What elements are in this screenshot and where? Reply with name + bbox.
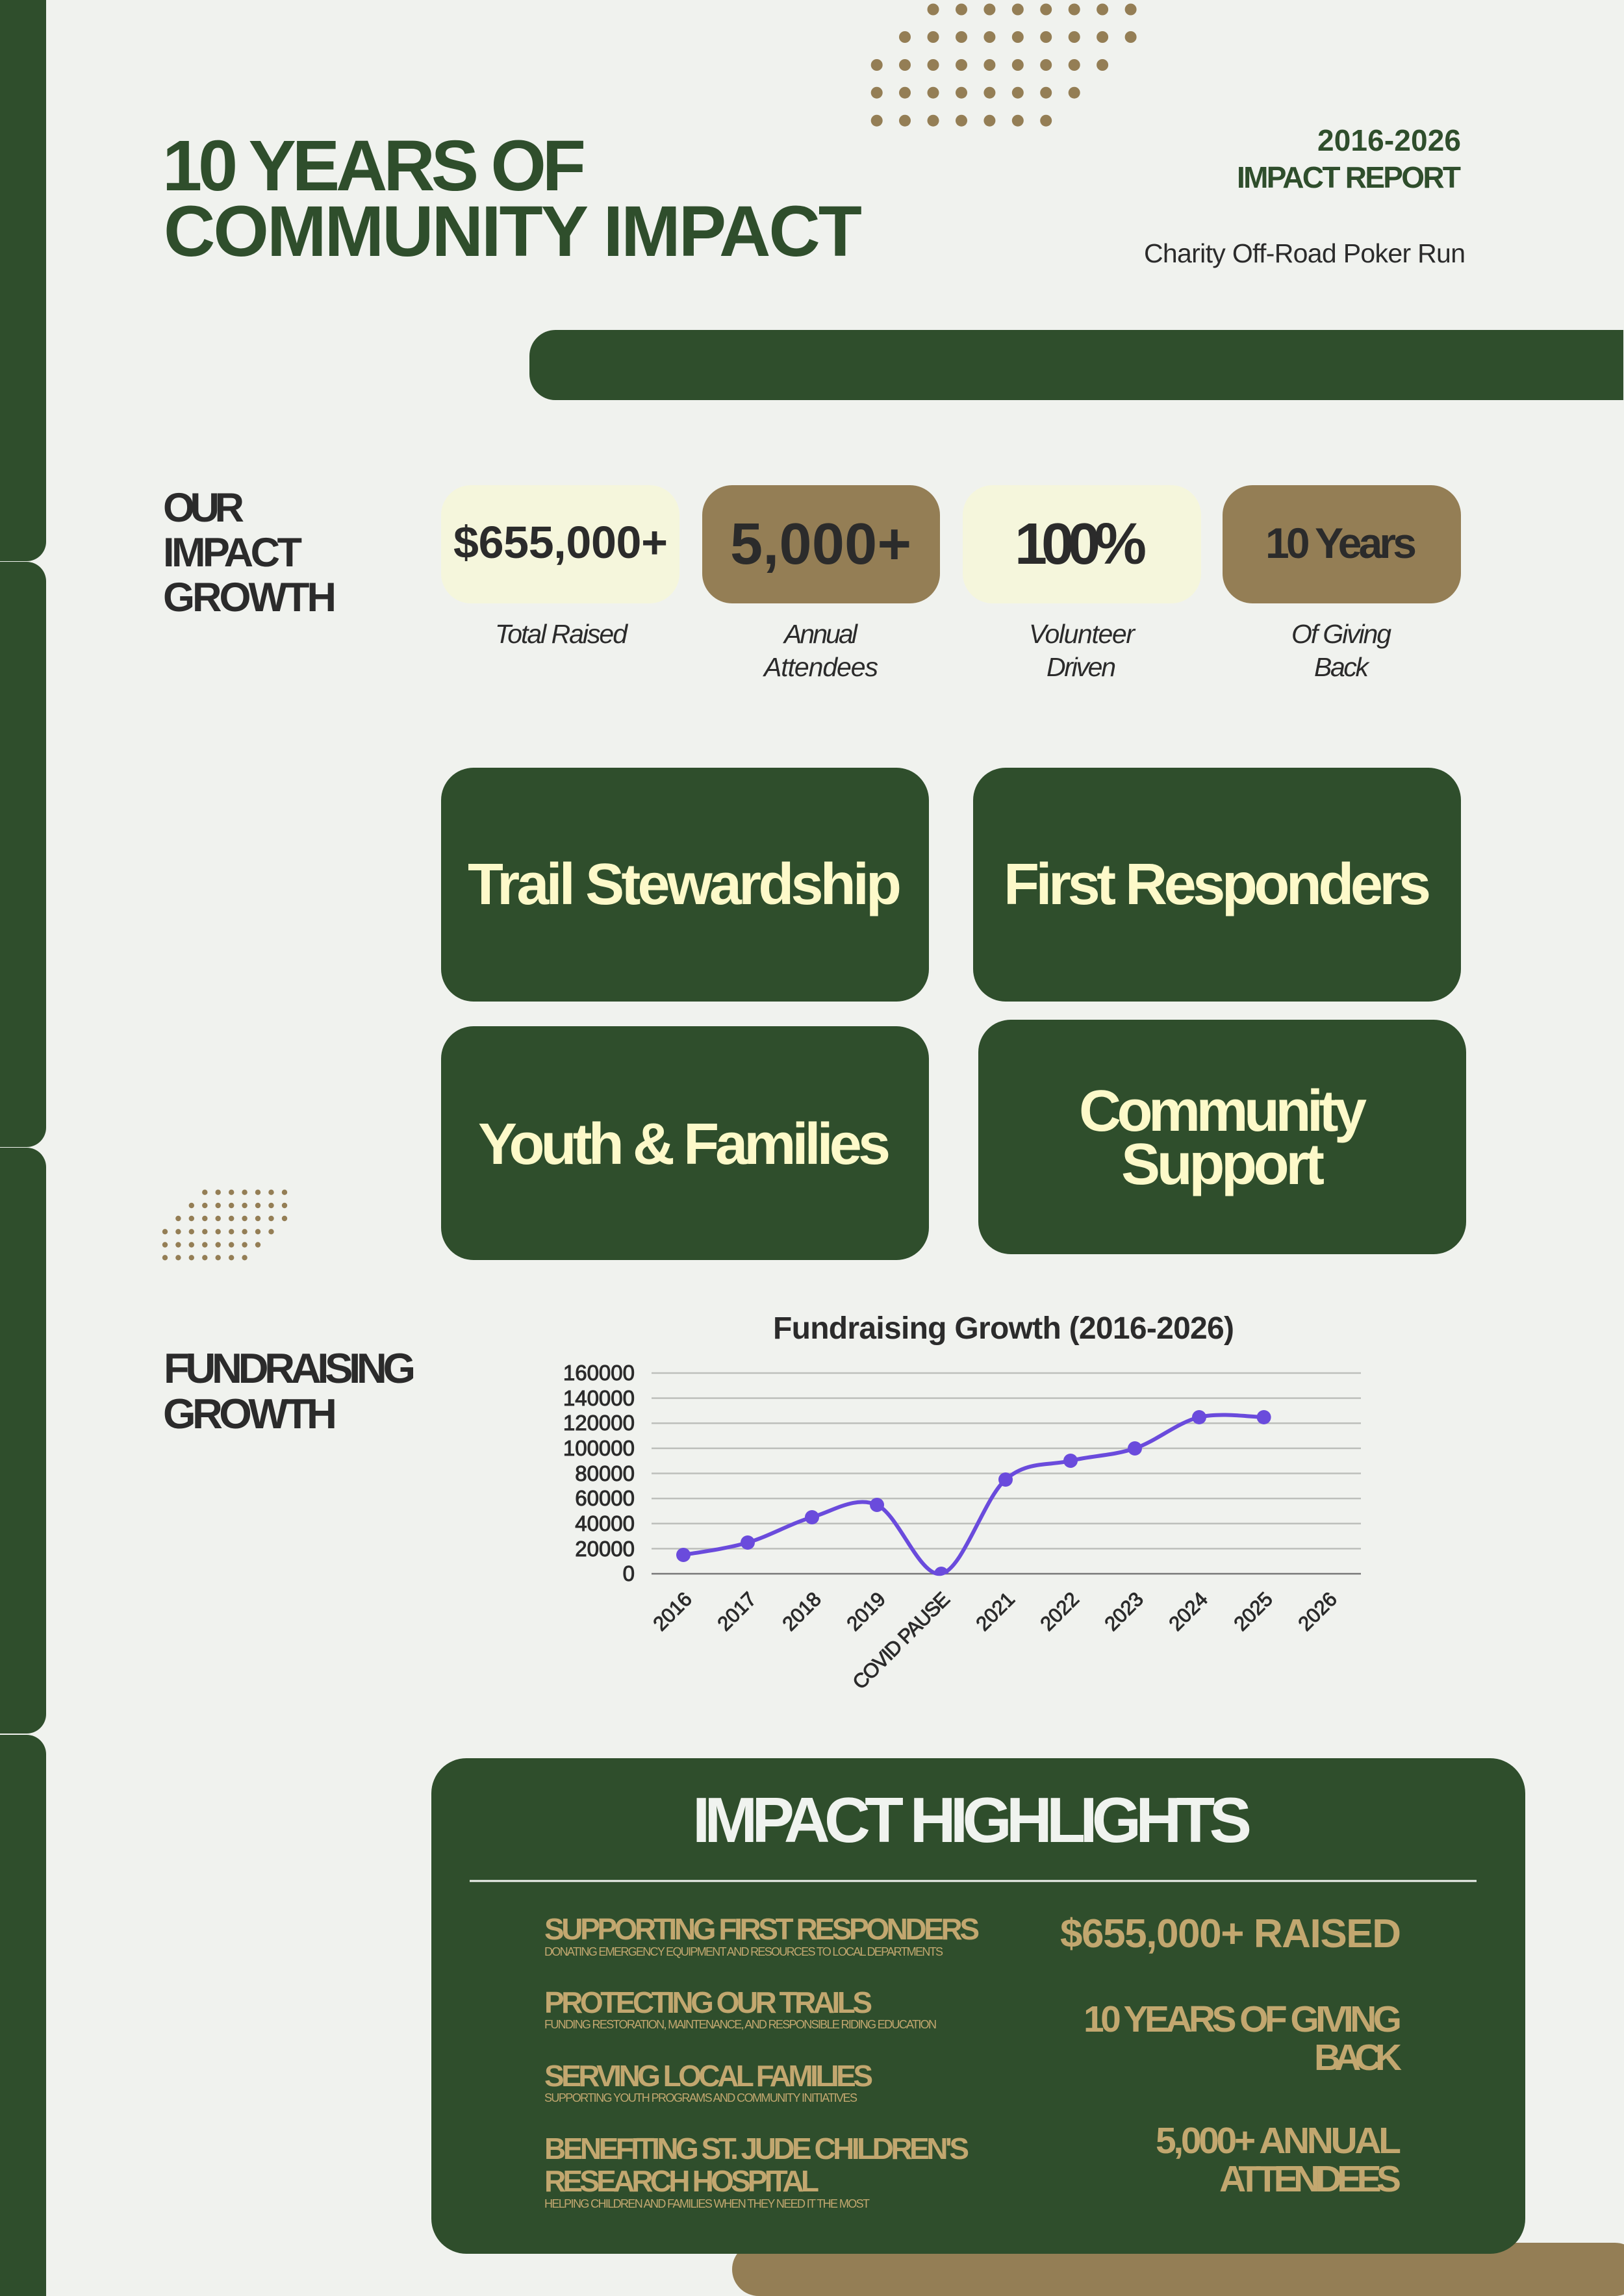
highlight: first responders: SUPPORTING FIRST RESPONDERS <box>544 1912 980 1946</box>
highlight: trails: FUNDING RESTORATION, MAINTENANCE, AND RESPONSIBLE RIDING EDUCATION <box>544 2018 937 2031</box>
gridlines <box>652 1373 1361 1574</box>
highlight: local families: SUPPORTING YOUTH PROGRAMS AND COMMUNITY INITIATIVES <box>544 2091 857 2104</box>
x axis labels <box>648 1587 1341 1694</box>
stat: of giving back: Back <box>1314 652 1371 682</box>
title: 10 YEARS OF <box>162 126 586 206</box>
x axis labels: 2019 <box>842 1587 890 1635</box>
data line <box>683 1415 1264 1574</box>
x axis labels: 2026 <box>1293 1587 1341 1635</box>
highlight: first responders: DONATING EMERGENCY EQUIPMENT AND RESOURCES TO LOCAL DEPARTMENTS <box>544 1945 943 1958</box>
highlight: trails: PROTECTING OUR TRAILS <box>544 1986 872 2019</box>
stat: of giving back: 10 Years <box>1265 519 1417 567</box>
x axis labels: COVID PAUSE <box>848 1587 954 1694</box>
stat: of giving back: Of Giving <box>1291 619 1391 649</box>
green header bar <box>529 330 1623 400</box>
highlight: trails <box>544 1986 937 2031</box>
stat: volunteer driven: 100% <box>1015 512 1147 577</box>
right stat: annual attendees <box>1156 2120 1401 2200</box>
report period heading <box>1237 123 1461 194</box>
card: community support: Community <box>1079 1079 1367 1144</box>
x axis labels: 2021 <box>971 1587 1019 1635</box>
highlight: st jude: HELPING CHILDREN AND FAMILIES WHEN THEY NEED IT THE MOST <box>544 2197 870 2210</box>
y axis labels: 0 <box>623 1561 635 1585</box>
y axis labels: 80000 <box>575 1461 635 1485</box>
heading: fundraising growth <box>163 1344 416 1437</box>
stat: volunteer driven: Volunteer <box>1029 619 1136 649</box>
highlight: local families: SERVING LOCAL FAMILIES <box>544 2059 873 2093</box>
right stat: annual attendees: 5,000+ ANNUAL <box>1156 2120 1401 2162</box>
card: first responders: First Responders <box>1004 852 1431 917</box>
heading: fundraising growth: FUNDRAISING <box>164 1344 416 1392</box>
x axis labels: 2023 <box>1100 1587 1148 1635</box>
stat: total raised: $655,000+ <box>453 517 668 568</box>
card: first responders <box>973 768 1461 1002</box>
card: community support <box>978 1020 1466 1254</box>
right stat: years of giving: BACK <box>1314 2037 1402 2078</box>
decorative dot grid: small <box>162 1190 287 1261</box>
card: youth and families: Youth & Families <box>478 1112 891 1177</box>
heading: our impact growth: OUR <box>163 485 244 531</box>
x axis labels: 2022 <box>1035 1587 1084 1635</box>
y axis labels <box>563 1361 635 1585</box>
card: youth and families <box>441 1026 929 1260</box>
left sidebar segments <box>0 0 46 2296</box>
line chart: fundraising growth <box>563 1311 1361 1694</box>
highlight: st jude <box>544 2132 969 2210</box>
right stat: raised: $655,000+ RAISED <box>1060 1911 1401 1956</box>
stat: total raised <box>441 485 679 649</box>
title <box>162 126 862 271</box>
report period heading: 2016-2026 <box>1317 123 1461 157</box>
report period heading: IMPACT REPORT <box>1237 160 1461 194</box>
y axis labels: 120000 <box>563 1411 635 1435</box>
stat: total raised: Total Raised <box>495 619 628 649</box>
heading: our impact growth: GROWTH <box>163 575 336 620</box>
right stat: years of giving <box>1084 1999 1402 2078</box>
right stat: years of giving: 10 YEARS OF GIVING <box>1084 1999 1402 2040</box>
chart title: Fundraising Growth (2016-2026) <box>773 1311 1234 1346</box>
right stat: annual attendees: ATTENDEES <box>1219 2158 1401 2200</box>
card: trail stewardship: Trail Stewardship <box>468 852 902 917</box>
card: community support: Support <box>1121 1132 1325 1197</box>
y axis labels: 140000 <box>563 1386 635 1410</box>
heading: fundraising growth: GROWTH <box>163 1390 337 1437</box>
y axis labels: 160000 <box>563 1361 635 1385</box>
card: trail stewardship <box>441 768 929 1002</box>
y axis labels: 60000 <box>575 1486 635 1510</box>
panel: impact highlights <box>431 1758 1525 2254</box>
y axis labels: 20000 <box>575 1537 635 1561</box>
subtitle: Charity Off-Road Poker Run <box>1144 238 1465 268</box>
data points <box>676 1410 1271 1574</box>
title: COMMUNITY IMPACT <box>164 192 862 271</box>
x axis labels: 2018 <box>778 1587 826 1635</box>
y axis labels: 100000 <box>563 1436 635 1460</box>
heading: our impact growth: IMPACT <box>163 530 302 575</box>
x axis labels: 2024 <box>1164 1587 1212 1635</box>
stat: of giving back <box>1223 485 1461 682</box>
x axis labels: 2025 <box>1229 1587 1277 1635</box>
heading: our impact growth <box>163 485 336 620</box>
highlight: st jude: BENEFITING ST. JUDE CHILDREN'S <box>544 2132 969 2165</box>
highlight: st jude: RESEARCH HOSPITAL <box>544 2164 819 2198</box>
panel heading: IMPACT HIGHLIGHTS <box>692 1784 1252 1856</box>
x axis labels: 2017 <box>713 1587 761 1635</box>
stat: annual attendees: 5,000+ <box>730 512 911 577</box>
decorative dot grid: top <box>871 4 1137 127</box>
stat: annual attendees <box>702 485 940 682</box>
stat: volunteer driven: Driven <box>1047 652 1116 682</box>
x axis labels: 2016 <box>648 1587 696 1635</box>
brown footer bar <box>732 2243 1624 2296</box>
stat: annual attendees: Annual <box>782 619 859 649</box>
y axis labels: 40000 <box>575 1511 635 1535</box>
stat: volunteer driven <box>963 485 1201 682</box>
stat: annual attendees: Attendees <box>762 652 878 682</box>
